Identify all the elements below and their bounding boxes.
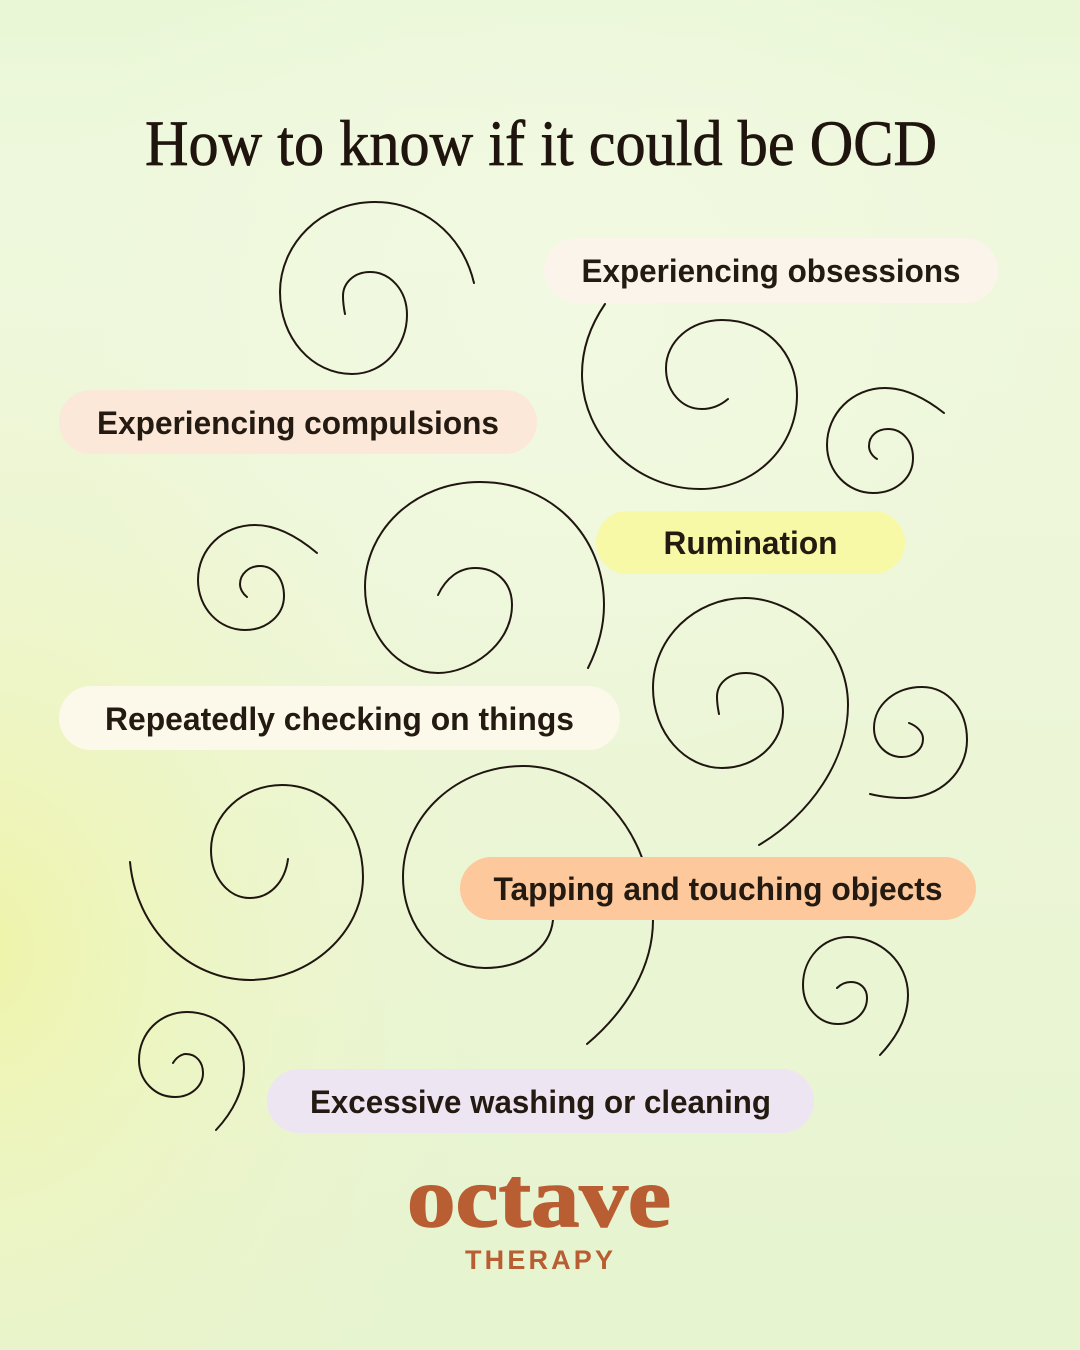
pill: Rumination bbox=[596, 511, 905, 574]
pill: Tapping and touching objects: Tapping and touching objects bbox=[494, 871, 942, 907]
pill: Repeatedly checking on things bbox=[59, 686, 620, 750]
pill: Tapping and touching objects bbox=[460, 857, 976, 920]
spiral: small bottom left bbox=[139, 1012, 244, 1130]
pill: Experiencing compulsions: Experiencing compulsions bbox=[97, 405, 499, 441]
pill: Excessive washing or cleaning: Excessive washing or cleaning bbox=[310, 1084, 771, 1120]
pill: Experiencing obsessions bbox=[544, 238, 998, 303]
spiral: small upper right bbox=[827, 388, 944, 493]
spiral: small far right bbox=[870, 687, 967, 798]
pill: Experiencing compulsions bbox=[59, 390, 537, 454]
spiral: lower left bbox=[130, 785, 363, 980]
spiral: small left bbox=[198, 525, 317, 630]
logo: octave therapy bbox=[407, 1149, 671, 1275]
spiral: top centre bbox=[280, 202, 474, 374]
spiral: lower centre bbox=[403, 766, 653, 1044]
logo: octave therapy: THERAPY bbox=[465, 1245, 613, 1275]
pill: Rumination: Rumination bbox=[664, 525, 838, 561]
pill: Repeatedly checking on things: Repeatedly checking on things bbox=[105, 701, 574, 737]
spiral: small lower right bbox=[803, 937, 908, 1055]
spiral: centre bbox=[365, 482, 604, 673]
spiral: below obsessions bbox=[582, 304, 797, 489]
title: How to know if it could be OCD bbox=[145, 108, 937, 180]
pill: Excessive washing or cleaning bbox=[267, 1069, 814, 1133]
pill: Experiencing obsessions: Experiencing obsessions bbox=[582, 253, 960, 289]
logo: octave therapy: octave bbox=[407, 1149, 671, 1245]
spiral: right large bbox=[653, 598, 848, 845]
